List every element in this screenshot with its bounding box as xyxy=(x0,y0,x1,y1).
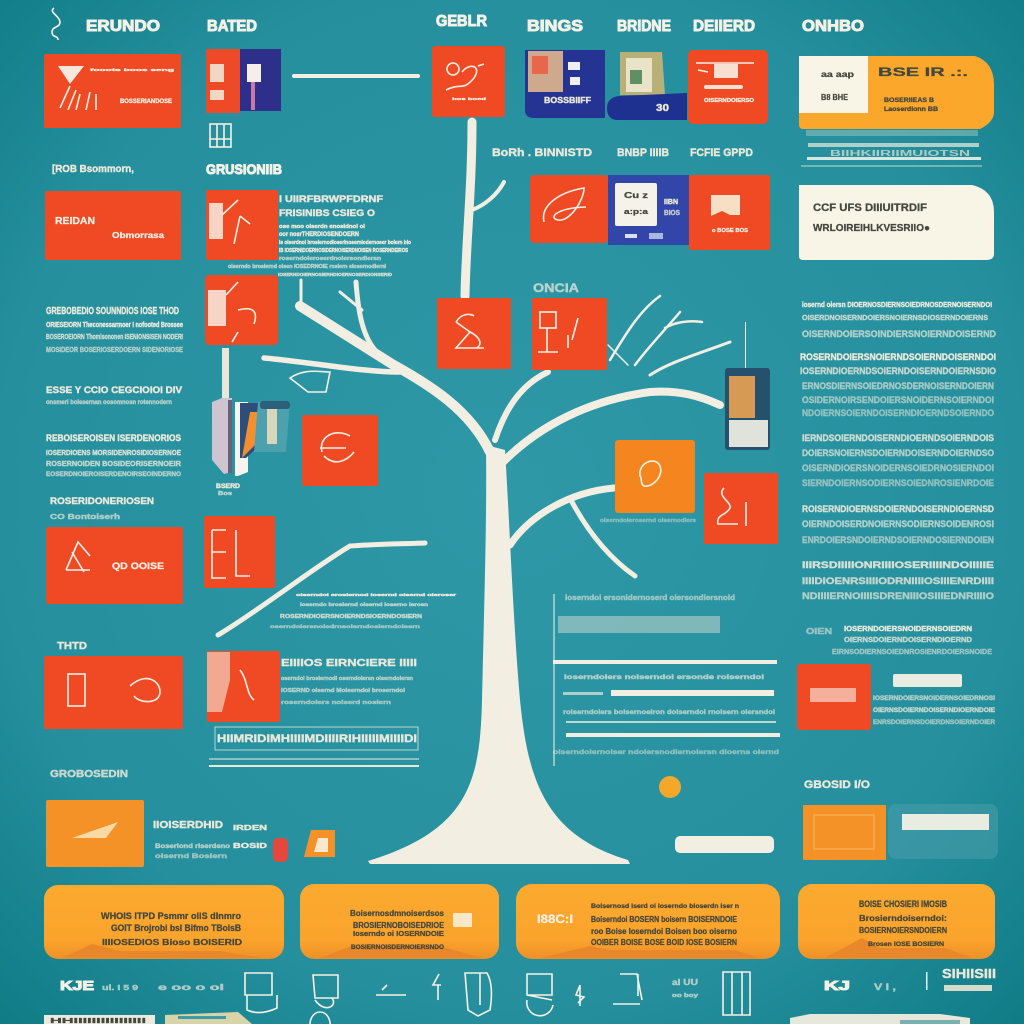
panel: red card 3 top: OISERNDOIERSO xyxy=(704,98,754,104)
text block D xyxy=(802,504,994,545)
text block D: ENRDOIERSNDOIERNDSOIERNDOSIERNDOIEN xyxy=(802,535,994,545)
label 3: ROSERIDONERIOSEN xyxy=(50,496,154,506)
panel: red card 3 top xyxy=(688,50,768,124)
panel: red card 1: BOSSERIANDOSE xyxy=(120,99,172,105)
text block 1: MOSIDEOR BOSERIOSERDOERN SIDENORIOSE xyxy=(46,347,183,354)
panel: red card 4 xyxy=(44,656,183,729)
red right xyxy=(689,175,770,250)
central-right text block: roiserndoiers boisernoeiron doiserndoi rnoisern oiersndoi xyxy=(563,710,775,716)
panel: red recycle card xyxy=(302,415,378,486)
text block 1: BOSEROEIORN Thomisononen ISENIONSISEN NODERI xyxy=(46,334,183,341)
text block E: IIIRSDIIIIIONRIIIIOSERIIIINDOIIIIIE xyxy=(802,560,994,570)
text block beside card: I UIIRFBRWPFDRNF xyxy=(279,194,384,204)
text block G: OIERNSDOIERNDOISERNDIOERNDOIE xyxy=(873,708,995,714)
panel: orange card xyxy=(46,800,144,867)
text block under branch: ROSERNDIOERSNOIERNDSIOERNDOSIERN xyxy=(280,614,423,620)
label 3 xyxy=(50,496,154,521)
text block under branch: oiserndoi erosiernod iosernd oisernd oieroser xyxy=(296,592,457,597)
text block B: NDOIERNSOIERNDOISERNDIOERNDSOIERNDO xyxy=(802,408,994,418)
text: orange card caption: BOSID xyxy=(233,843,267,850)
text block 3 xyxy=(46,433,181,478)
panel: orange card 2: Ioserndo oi IOSERNDOIE xyxy=(353,931,444,938)
panel: red icon card xyxy=(206,190,278,260)
table block: HIIMRIDIMHIIIIMDIIIIRIHIIIIIMIIIIDI xyxy=(217,733,417,745)
text block beside page card: IOSERND oisernd Moiserndoi broserndoi xyxy=(281,688,406,694)
illustration: folder: BSERD xyxy=(216,484,241,490)
panel: orange and white card: BSE IR .:. xyxy=(878,65,968,79)
text block F: EIRNSODIERNSOIEDNROSIENRDOIERSNOIDE xyxy=(832,649,992,656)
connector xyxy=(222,348,229,406)
panel: orange card 4: Brosierndoiserndoi: xyxy=(859,914,947,923)
header row: ONHBO xyxy=(802,18,864,35)
panel: red card 1 xyxy=(44,54,181,128)
text block 2: ESSE Y CCIO CEGCIOIOI DIV xyxy=(46,385,182,395)
bottom orange cards xyxy=(44,884,995,959)
icon: orange tag xyxy=(304,830,335,857)
subheading row xyxy=(492,147,753,159)
text block beside card: FRISINIBS CSIEG O xyxy=(279,208,375,218)
text: orange card caption: IRDEN xyxy=(233,825,267,832)
panel: bottom right card xyxy=(803,804,998,860)
text block D: ROISERNDIOERNSDOIERNDOISERNDIOERNSD xyxy=(802,504,994,514)
panel: orange card 1 xyxy=(44,885,284,959)
second column xyxy=(204,49,457,767)
panel: orange and white card: B8 BHE xyxy=(821,93,849,102)
text block beside card: ls oiserdnoi brosiernodioserinoserniodernoser boiern bio xyxy=(279,240,412,246)
text: orange card caption xyxy=(153,820,267,860)
left column xyxy=(44,54,335,867)
panel: blue card 2 xyxy=(607,52,687,120)
label 2: [ROB Bsommorn, xyxy=(52,164,134,175)
text block A xyxy=(802,302,996,339)
text: mid icon caption: aI UU xyxy=(672,978,698,987)
panel: orange card 1: GOIT Brojrobi bsI Bifmo TBoisB xyxy=(111,923,241,933)
table block xyxy=(209,727,419,767)
text block B: OSIDERNOIRSENDOIERSNOIDERNSOIERNDOI xyxy=(802,395,994,405)
tree trunk xyxy=(368,445,630,864)
text block A: iosernd oiersn DIOERNOSDIERNSOIEDRNOSDERNOISERNDOI xyxy=(802,302,992,309)
header row: BRIDNE xyxy=(617,18,671,35)
label: right xyxy=(824,966,996,993)
central-right text block: ioserndoi ersonidernoserd oiersondiersnoid xyxy=(565,595,735,602)
panel: orange card 4: BOSIERNOIERSNDOIERN xyxy=(859,926,947,935)
panel: blue card 2: 30 xyxy=(656,103,670,114)
text: orange card caption: IIOISERDHID xyxy=(153,820,223,831)
header row: BATED xyxy=(207,18,257,35)
panel: orange card 3: I88C:I xyxy=(537,912,573,926)
panel: red card bottom right xyxy=(797,664,871,730)
panel: red card top xyxy=(432,46,505,117)
panel: red card branch xyxy=(532,298,607,370)
label: left: KJE xyxy=(60,978,94,993)
text bars under orange card xyxy=(801,130,982,167)
panel: red card right of tree xyxy=(704,473,778,544)
text block beside card: IB IOSERNIDOERNOSIDERNOISERDNOISEN ROSERNDEIROS xyxy=(279,248,408,254)
text block A: OISERNDOIERSOINDIERSNOIERNDOISERND xyxy=(802,329,996,339)
panel: orange card 3 xyxy=(516,884,780,959)
illustration: folder xyxy=(212,398,290,497)
panel: red card with page xyxy=(207,651,280,722)
text block B: ERNOSDIERNSOIEDRNOSDERNOISERNDOIERN xyxy=(802,381,994,391)
panel: red card 1: fooots boos seng xyxy=(90,67,175,72)
text block A: OISERDNOISERNDOIERSNOIERNSDIOSERNDOIERNS xyxy=(802,313,988,322)
panel: orange card 2: Boisernosdmnoiserdsos xyxy=(350,909,445,918)
panel: orange card 3: roo Boise Ioserndoi Boisen boo oiserno xyxy=(591,927,737,936)
panel: orange card 4 xyxy=(798,884,995,959)
icon: red tag xyxy=(273,838,288,862)
text block F: OIERNSDOIERNDOISERNDIOERND xyxy=(844,637,972,644)
bottom strip right xyxy=(790,1014,970,1024)
panel: red card tall xyxy=(204,516,275,588)
text block B: IOSERNDIOERNDSOIERNDOISERNDOIERNSDIO xyxy=(800,366,996,376)
text block 3: IOSERDIOENS MORSIDENROSIDIOSERNOE xyxy=(46,450,181,457)
text block F: OIEN xyxy=(806,627,832,636)
text block beside card xyxy=(228,194,412,277)
panel: red card trunk xyxy=(437,298,511,369)
panel: cream card xyxy=(799,185,994,260)
icon: leaf xyxy=(290,371,330,392)
text block G: IOSERNDOIERSNOIDERNSOIEDRNOSI xyxy=(873,696,995,702)
panel: orange round card xyxy=(615,440,695,513)
bottom strip left xyxy=(44,1012,252,1024)
text: mid icon caption xyxy=(672,978,698,999)
header row xyxy=(52,8,864,40)
text block beside card: roserndoieroserdnoiersondiersn xyxy=(279,256,381,262)
text block E: IIIIDIOENRSIIIIODRNIIIIOSIIIENRDIIII xyxy=(802,576,994,586)
faint text block beneath branch: oiserndoierosernd oisernodiers xyxy=(600,518,696,524)
panel: red card 2 xyxy=(45,191,181,260)
text block 1 xyxy=(46,306,183,354)
panel: blue card 1 xyxy=(525,50,605,118)
header row: GEBLR xyxy=(436,13,487,30)
bottom icon row xyxy=(44,966,996,1024)
tree xyxy=(218,74,730,864)
text block C xyxy=(802,433,994,488)
text block 2: onsmeri boiesernan oosomnosn rotennodern xyxy=(46,400,172,406)
header row: DEIIERD xyxy=(693,18,755,35)
header row: ERUNDO xyxy=(86,18,160,35)
label 5: GROBOSEDIN xyxy=(50,769,128,780)
text block beside page card xyxy=(281,658,417,706)
central-right text block: ioserndoiers noiserndoi ersonde roiserndoi xyxy=(564,675,765,681)
label: right: V I , xyxy=(874,982,896,992)
heading: GRUSIONIIB xyxy=(206,161,282,177)
centre cards xyxy=(432,46,778,544)
subheading row: BoRh . BINNISTD xyxy=(492,147,592,159)
panel: three-part card: BIOS xyxy=(664,210,680,217)
text block 3: ROSERNOIDEN BOSIDEORISERNOEIR xyxy=(46,461,181,468)
panel: orange card 3: Boiserndoi BOSERN boisern BOISERNDOIE xyxy=(591,915,738,924)
text block under branch: oserndoiersnoiedrnsoierndosierndoiesrn xyxy=(270,624,420,629)
panel: three-part card: a:p:a xyxy=(624,209,648,216)
text block 3: EOSERDNOIEROISERDENOIRSEOINDERNO xyxy=(46,472,181,478)
panel: orange card 2: BOSIERNOISDERNOIERSNDO xyxy=(351,945,444,951)
panel: blue card 1: BOSSBIIFF xyxy=(544,96,591,105)
text block 3: REBOISEROISEN ISERDENORIOS xyxy=(46,433,181,443)
label: GBOSID I/O xyxy=(804,779,870,791)
icon: header glyph xyxy=(52,8,60,40)
text block 1: GREBOBEDIO SOUNNDIOS IOSE THOD xyxy=(46,306,179,317)
panel: orange card 1: WHOIS ITPD Psmmr oliS dlnmro xyxy=(101,911,242,921)
tree branches xyxy=(218,122,730,635)
panel: orange card 2 xyxy=(300,884,499,959)
header row: BINGS xyxy=(527,18,583,35)
panel: red card 2: Obmorrasa xyxy=(112,231,165,240)
label: left xyxy=(60,978,224,993)
panel: red card top: bos boed xyxy=(452,96,487,101)
panel: three-part card: IIBN xyxy=(664,199,678,206)
text block beside card: oiserndo brosiernd oisen IOSEDRNOIE rosiern eiosernodierni xyxy=(228,264,387,270)
label 4: THTD xyxy=(57,641,87,652)
panel: cream card: CCF UFS DIIIUITRDIF xyxy=(813,202,927,214)
blue centre xyxy=(608,175,689,245)
text block beside page card: oserndoi brosiernodi oserndoiersn oiserndoiersn xyxy=(281,676,413,682)
panel: red card 3 xyxy=(46,527,183,604)
panel: orange and white card: aa aap xyxy=(821,70,854,79)
icons row xyxy=(245,972,750,1024)
subheading row: BNBP IIIIB xyxy=(617,147,669,159)
text block C: SIERNDOIERNSODIERNSOIEDNROSIENRDOIE xyxy=(802,478,994,488)
text block 2 xyxy=(46,385,182,406)
illustration: folder: Bos xyxy=(218,491,232,497)
text bars under orange card: BIIHKIIRIIMUIOTSN xyxy=(830,149,970,158)
label: left: e oo o ol xyxy=(158,983,224,992)
panel: orange and white card xyxy=(799,56,994,129)
central-right text block: oiserndoiernoiser ndoiersnodiernoiersn dioerns oiernd xyxy=(553,750,779,756)
label: left: ul. I 5 9 xyxy=(102,985,138,992)
text block G: ENRSDOIERNSDOIERDNSOIERNDOIER xyxy=(873,720,996,726)
text block under branch: ioserndo brosiernd oisernd ioserno ierosn xyxy=(300,602,428,607)
panel: orange and white card: BOSERIIEAS B xyxy=(884,98,935,104)
text block D: OIERNDOISERDNOIERNSODIERNSOIDENROSI xyxy=(802,519,994,529)
text block F: IOSERNDOIERSNOIDERNSOIEDRN xyxy=(844,626,972,633)
white connector line xyxy=(292,74,420,78)
dot: yellow xyxy=(659,776,681,798)
panel: orange card 2: BROSIERNOBOISEDRIOE xyxy=(353,921,445,930)
panel: orange card 3: Boisernosd iserd oi ioserndo bioserdn iser n xyxy=(591,904,739,910)
panel: orange card 4: BOISE CHOSIERI IMOSIB xyxy=(859,899,947,909)
label: right: SIHIISIII xyxy=(942,966,996,981)
text block beside card: IOSERNDOIERNOSIERNDIOERNOSERDIONSERID xyxy=(278,272,393,277)
text block beside page card: roserndoiers noiserd nosiern xyxy=(281,700,391,706)
text block beside card: oor nosrTHERDIOSENDOERN xyxy=(279,232,359,238)
text block C: OISERNDIOERSNOIDERNSOIEDRNOSIERNDOI xyxy=(802,463,994,473)
text: orange card caption: Boseriond riserdeno xyxy=(155,844,230,850)
panel: three-part card xyxy=(530,175,770,250)
text: orange card caption: oisernd Bosiern xyxy=(155,854,228,860)
panel: red and blue split card xyxy=(206,49,281,113)
text block 1: ORIESEIORN Theconessarmoer I nofooted Brossee xyxy=(46,322,183,329)
text block G xyxy=(873,674,996,726)
text block B: ROSERNDOIERSNOIERNDSOIERNDOISERNDOI xyxy=(800,352,996,362)
panel: orange card 4: Brosen IOSE BOSIERN xyxy=(868,942,944,948)
text block C: IERNDSOIERNDOISERNDIOERNDSOIERNDOIS xyxy=(802,433,994,443)
text block C: DOIERSNOIERNSDOIERNDOISERNDOIERNDSO xyxy=(802,448,994,458)
panel: three-part card: o BOSE BOS xyxy=(712,228,748,234)
text block beside card: ose moo oiserdn enosidnoi oi xyxy=(279,224,366,230)
panel: red card 2: REIDAN xyxy=(55,216,95,227)
icon: book xyxy=(210,124,231,147)
panel: orange card 1: IIIIOSEDIOS Bioso BOISERID xyxy=(102,938,242,947)
central-right text block xyxy=(553,594,780,766)
text block beside page card: EIIIIOS EIRNCIERE IIIII xyxy=(281,658,417,669)
text block E: NDIIIIERNOIIIISDRENIIIOSIIIEDNRIIIIO xyxy=(802,591,994,601)
panel: red icon card lower xyxy=(205,275,278,345)
red left xyxy=(530,175,608,243)
panel: orange card 3: OOIBER BOISE BOSE BOID IOSE BOSIERN xyxy=(591,938,737,947)
label: right: KJ xyxy=(824,978,850,993)
pill: white xyxy=(675,836,774,853)
text block F xyxy=(806,626,992,656)
panel: orange and white card: Laoserdionn BB xyxy=(884,107,939,113)
panel: three-part card: Cu z xyxy=(624,191,648,200)
illustration: hanging card xyxy=(725,322,770,450)
text block E xyxy=(802,560,994,601)
text block under branch xyxy=(270,592,457,629)
text: mid icon caption: oo boy xyxy=(672,993,698,999)
subheading row: FCFIE GPPD xyxy=(690,147,753,159)
panel: red card 3: QD OOISE xyxy=(112,561,164,571)
panel: cream card: WRLOIREIHLKVESRIIO● xyxy=(813,223,930,234)
label: ONCIA xyxy=(533,281,579,295)
label 3: CO Bontoiserh xyxy=(50,514,120,521)
text block B xyxy=(800,352,996,418)
